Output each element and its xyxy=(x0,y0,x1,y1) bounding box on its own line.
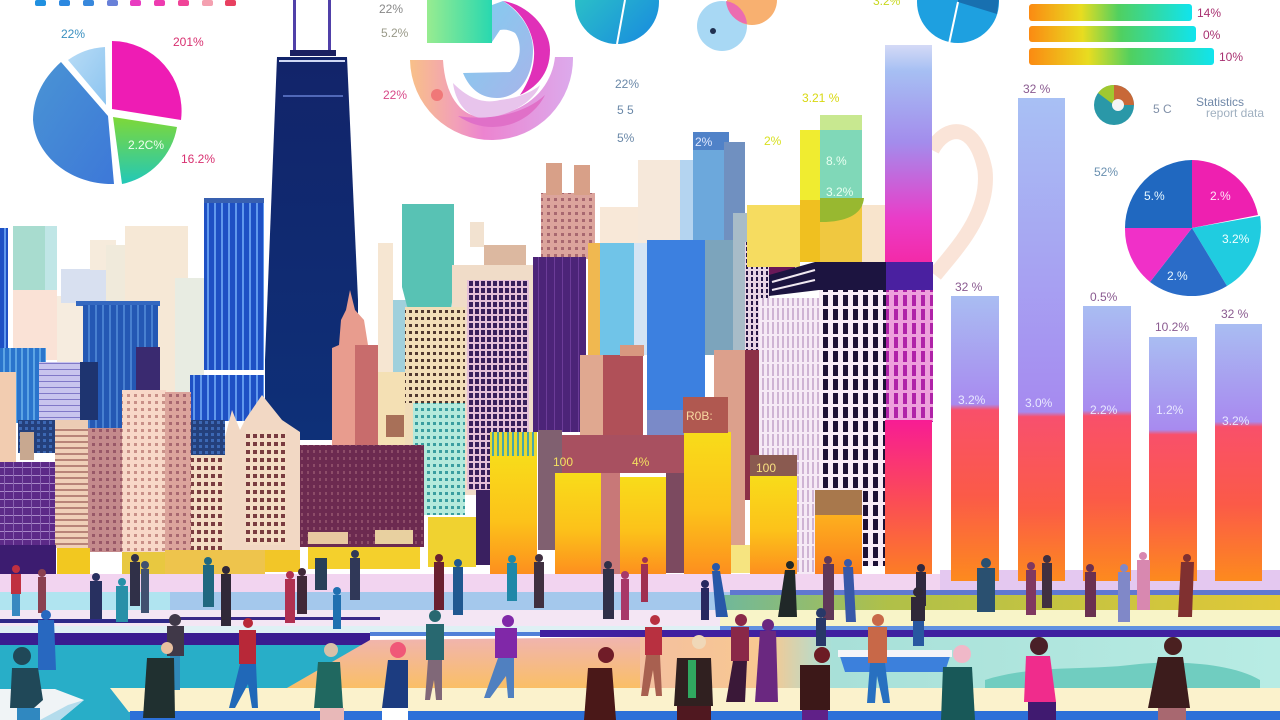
bar 1 xyxy=(951,296,999,581)
left face xyxy=(759,298,819,576)
boat platform xyxy=(838,650,952,672)
pie chart: right: 5.% xyxy=(1144,189,1165,203)
pie wedge: light blue xyxy=(68,47,106,105)
mini donut icon and caption: 5 C xyxy=(1153,102,1172,116)
promenade back xyxy=(0,574,940,592)
vertical bar chart: 3.2% xyxy=(1222,414,1250,428)
yellow overlay bars upper: 8.% xyxy=(826,154,847,168)
front face xyxy=(819,290,886,566)
purple lines xyxy=(0,619,170,623)
pie wedge: blue xyxy=(33,62,114,184)
stacked text: percent list: 5% xyxy=(617,131,635,145)
bar labels: 10.2% xyxy=(1155,320,1189,334)
horizontal rainbow bars: 10% xyxy=(1219,50,1243,64)
bar labels: 32 % xyxy=(955,280,983,294)
bar 2 xyxy=(1018,98,1065,581)
stacked text: percent list xyxy=(615,77,639,145)
donut labels: 22% xyxy=(379,2,403,16)
blue-grey towers xyxy=(680,160,693,245)
yellow-orange bar series: R0B: xyxy=(686,409,713,423)
pie chart: right xyxy=(1094,160,1261,296)
pie chart: top centre xyxy=(575,0,659,44)
left terrace xyxy=(0,592,170,614)
grid tower and maroon block xyxy=(745,242,770,352)
skyline: centre towers xyxy=(405,132,795,575)
pie chart: right: 2.% xyxy=(1210,189,1231,203)
skyline: tall dark tower with antennas xyxy=(265,0,358,440)
peach arc behind bars xyxy=(932,132,985,275)
vertical bar chart xyxy=(951,82,1262,581)
vertical bar chart: 3.0% xyxy=(1025,396,1053,410)
pie labels: 201% xyxy=(173,35,204,49)
pie wedge: magenta xyxy=(112,41,182,120)
bar labels: 32 % xyxy=(1221,307,1249,321)
yellow overlay bars upper: 2% xyxy=(695,135,713,149)
yellow overlay bars upper: 3.2% xyxy=(826,185,854,199)
vertical bar chart: 1.2% xyxy=(1156,403,1184,417)
pie labels: 22% xyxy=(61,27,85,41)
crowd: middle row xyxy=(38,587,925,708)
bar 5 xyxy=(1215,324,1262,581)
donut labels: 5.2% xyxy=(381,26,409,40)
pie labels xyxy=(61,27,215,166)
yellow overlay bars upper xyxy=(695,91,864,267)
yellow-orange bar series: 100 xyxy=(756,461,776,475)
mini donut icon and caption xyxy=(1094,85,1264,125)
yellow podiums xyxy=(57,548,90,576)
mini donut icon and caption: report data xyxy=(1206,106,1264,120)
horizontal rainbow bars xyxy=(1029,4,1243,65)
yellow-orange bar series xyxy=(490,397,862,575)
front path xyxy=(110,688,1280,712)
stacked text: percent list: 22% xyxy=(615,77,639,91)
pie chart: right: 2.% xyxy=(1167,269,1188,283)
donut labels xyxy=(379,2,409,102)
terracotta blocks xyxy=(580,355,603,435)
pale lilac band xyxy=(453,83,540,118)
outer crescent xyxy=(410,57,573,140)
yellow overlay bars upper: 2% xyxy=(764,134,782,148)
bar labels: 0.5% xyxy=(1090,290,1118,304)
donut labels: 22% xyxy=(383,88,407,102)
vertical bar chart: 2.2% xyxy=(1090,403,1118,417)
teal hills xyxy=(985,663,1260,690)
bar labels xyxy=(955,82,1249,334)
crowd: front row xyxy=(10,635,1190,720)
yellow overlay bars upper: 3.21 % xyxy=(802,91,840,105)
tan twin-top tower xyxy=(541,193,595,259)
skyline: pale background buildings xyxy=(13,160,886,408)
pink lower band xyxy=(458,95,545,127)
bar 3 xyxy=(1083,306,1131,581)
crowd: back row xyxy=(11,550,1194,629)
bar labels: 32 % xyxy=(1023,82,1051,96)
pie labels: 2.2C% xyxy=(128,138,164,152)
blue inner crescent xyxy=(463,1,533,98)
pie chart: right: 3.2% xyxy=(1222,232,1250,246)
yellow-orange bar series: 4% xyxy=(632,455,650,469)
green block xyxy=(427,0,492,43)
venn circles xyxy=(697,0,777,51)
heart marker xyxy=(431,89,443,101)
mini donut icon and caption: Statistics xyxy=(1196,95,1244,109)
tall magenta bar xyxy=(885,45,933,575)
teal water left xyxy=(0,645,370,700)
horizontal rainbow bars: 0% xyxy=(1203,28,1221,42)
peach plaza xyxy=(280,637,640,692)
pie chart: top right xyxy=(873,0,1000,44)
white grid building xyxy=(759,262,933,576)
donut chart: top centre xyxy=(379,0,573,140)
pie labels: 16.2% xyxy=(181,152,215,166)
skyline: lower left buildings xyxy=(0,372,476,576)
pie chart: right: 52% xyxy=(1094,165,1118,179)
lawn strip xyxy=(720,595,1280,610)
roof band xyxy=(769,262,933,296)
magenta ring xyxy=(503,1,550,95)
yellow-orange bar series: 100 xyxy=(553,455,573,469)
cream grid tower xyxy=(452,265,534,495)
top legend swatches xyxy=(35,0,236,6)
vertical bar chart: 3.2% xyxy=(958,393,986,407)
bar 4 xyxy=(1149,337,1197,581)
pie chart: left xyxy=(33,27,215,184)
left platform xyxy=(0,689,84,720)
skyline: teal and salmon towers xyxy=(332,204,454,446)
horizontal rainbow bars: 14% xyxy=(1197,6,1221,20)
ground plaza: walkways and water xyxy=(0,570,1280,720)
pie wedge: green xyxy=(113,117,177,184)
skyline: blue buildings left xyxy=(0,198,264,455)
stacked text: percent list: 5 5 xyxy=(617,103,634,117)
